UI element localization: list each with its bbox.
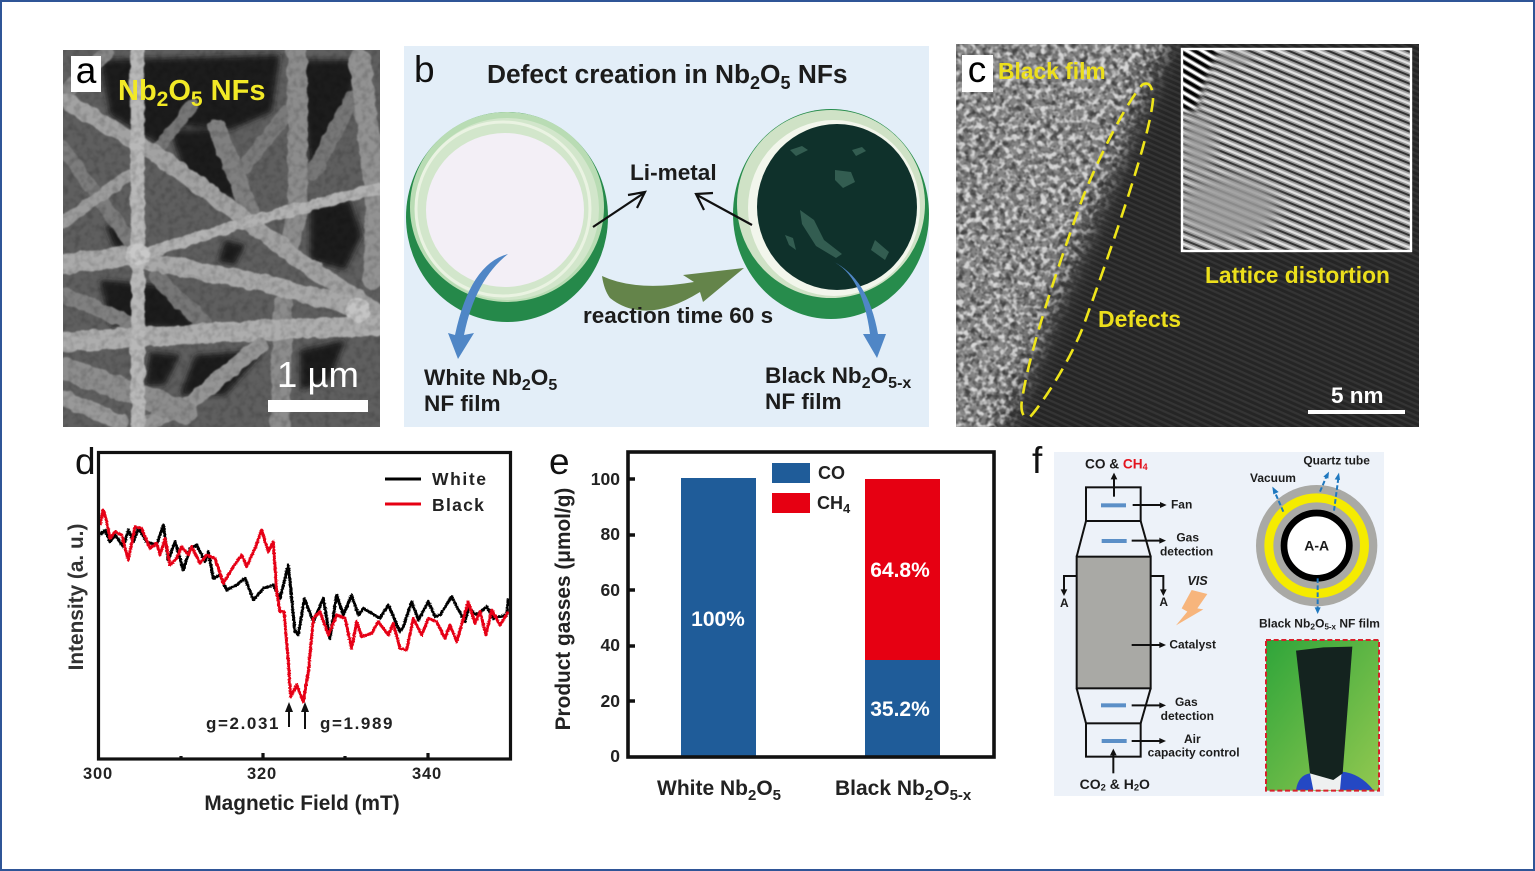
label: white film: White Nb [424,365,522,390]
x label: white: O [756,777,773,800]
label: NF film left: NF film [424,391,501,416]
sensors [1101,503,1127,743]
label: Nb2O5 NFs: Nb [118,75,157,107]
x label: white: 2 [748,787,756,804]
label: Black film: Black film [998,58,1106,84]
black sample trace [100,510,508,702]
cross-section labels [1250,454,1380,631]
panel letter e: e [549,441,570,482]
label: lattice distortion: Lattice distortion [1205,262,1390,288]
leader arrowheads [1272,472,1340,614]
reactor labels: capacity control [1148,746,1240,760]
label: black film: 2 [862,375,871,392]
x label: black: Black Nb [835,777,925,800]
icon: VIS light bolt: VIS [1187,574,1208,588]
x label: black: 2 [925,787,933,804]
bar: Black Nb2O5-x [865,479,940,757]
scale bar: 5 nm: 5 nm [1331,383,1384,408]
reactor labels: Fan [1171,498,1192,512]
label: reaction time: reaction time 60 s [583,303,773,328]
reactor labels: Gas [1176,531,1199,545]
panel e: product gas bar chart [549,441,994,804]
reactor labels: Catalyst [1169,638,1216,652]
x tick labels: 340 [412,765,442,783]
reactor labels: & H [1106,776,1134,792]
cross-section labels: Black Nb [1259,617,1310,631]
reactor labels: CO & CH [1085,456,1143,471]
panel c: TEM image [956,44,1419,427]
cross-section labels: 5-x [1324,622,1337,631]
label: Nb2O5 NFs: O [168,75,191,107]
plot frame [628,452,994,757]
legend: White [432,469,488,489]
label: NF film right: NF film [765,389,842,414]
y tick labels: 0 [610,746,620,766]
cross-section labels: Quartz tube [1303,454,1370,468]
x label: white: 5 [773,787,781,804]
reactor labels: 2 [1101,783,1106,793]
x tick labels [83,765,442,783]
blue arrow left [448,254,508,359]
cross-section labels: NF film [1336,617,1380,631]
cross-section A-A: A-A [1304,537,1329,553]
heading: defect creation: O [760,59,781,89]
cross-section labels: 2 [1310,621,1315,631]
y tick labels: 80 [601,524,620,544]
x label: black: 5-x [950,787,972,804]
black Nb2O5-x coin [733,109,929,319]
label: black film: 5-x [888,375,911,392]
panel letter c [962,49,993,92]
label: Nb2O5 NFs: 5 [191,88,203,111]
label: black film: O [871,363,888,388]
plot frame and ticks [98,452,510,759]
y tick labels: 40 [601,635,620,655]
inset: lattice fringe [1178,49,1411,251]
g-value annotations: g=2.031 [206,714,280,733]
scale bar: 5 nm [1308,383,1405,414]
y tick labels: 60 [601,580,620,600]
label: Defects: Defects [1098,306,1181,332]
bar: White Nb2O5: 100% [691,608,745,631]
white sample trace [100,525,508,638]
label: Nb2O5 NFs: 2 [157,88,168,111]
panel f: photoreactor schematic [1054,452,1384,796]
reactor labels: O [1139,776,1150,792]
photo of rolled film [1266,640,1379,791]
green reaction arrow [602,268,744,311]
reactor labels: Gas [1175,695,1198,709]
y tick labels: 20 [601,691,620,711]
label: black film: Black Nb [765,363,862,388]
reactor body [1077,487,1151,757]
reactor labels [1060,456,1240,793]
x label: white: White Nb [657,777,748,800]
cross-section labels: Vacuum [1250,471,1296,485]
panel d: EPR spectrum [65,441,510,815]
y tick labels: 100 [591,469,620,489]
icon: VIS light bolt [1176,574,1208,625]
g-value annotations: g=1.989 [320,714,394,733]
reactor labels: Air [1184,732,1201,746]
heading: defect creation: 2 [750,73,760,93]
heading: defect creation: NFs [791,59,848,89]
reactor labels: detection [1161,709,1214,723]
dashed leader arrows [1274,476,1338,608]
cross-section labels: O [1315,617,1324,631]
EPR curves [100,510,508,702]
y tick labels [591,469,620,766]
x tick labels: 300 [83,765,113,783]
label: white film: 2 [522,377,531,394]
label: Li-metal with arrows: Li-metal [630,160,717,185]
scale bar: 1 µm: 1 µm [277,354,359,395]
label: Li-metal with arrows [593,160,752,227]
reactor labels: 4 [1143,462,1148,472]
bar: Black Nb2O5-x: 64.8% [870,559,930,582]
heading: defect creation: Defect creation in Nb [487,59,750,89]
x tick labels: 320 [247,765,277,783]
g-value annotations [206,702,394,733]
bar: Black Nb2O5-x: 35.2% [870,698,930,721]
x-axis title: Magnetic Field (mT) [204,792,400,815]
legend: 4 [843,501,851,516]
SEM fibre network [63,50,380,427]
panel letter a: a [76,50,97,91]
panel letter a [71,50,101,92]
panel a: SEM image of nanofibres [63,50,380,427]
reactor labels: A [1060,596,1069,610]
panel letter f: f [1032,440,1043,481]
label: white film: 5 [548,377,557,394]
cross-section A-A [1256,485,1377,606]
legend: CO [818,463,845,483]
legend [772,463,851,516]
bar: White Nb2O5 [681,478,756,757]
legend: CH [817,493,843,513]
white Nb2O5 coin [406,112,608,322]
panel b: defect creation photos [404,46,929,427]
panel letter b: b [414,49,435,90]
panel letter d: d [75,441,96,482]
blue arrow right [832,261,886,358]
reactor labels: A [1159,595,1168,609]
reactor labels: detection [1160,544,1213,558]
panel letter c: c [968,49,986,90]
label: Nb2O5 NFs: NFs [203,75,265,107]
x label: black: O [933,777,950,800]
reactor labels: CO [1080,776,1101,792]
scale bar: 1 µm [268,354,368,412]
callout arrows [1061,473,1167,773]
TEM micrograph [956,44,1419,427]
dashed defect outline [1021,84,1153,418]
y-axis title: Product gasses (μmol/g) [552,488,575,730]
y-axis title: Intensity (a. u.) [65,524,88,670]
heading: defect creation: 5 [781,73,791,93]
label: white film: O [531,365,548,390]
legend [385,469,488,515]
reactor labels: 2 [1134,783,1139,793]
legend: Black [432,495,485,515]
